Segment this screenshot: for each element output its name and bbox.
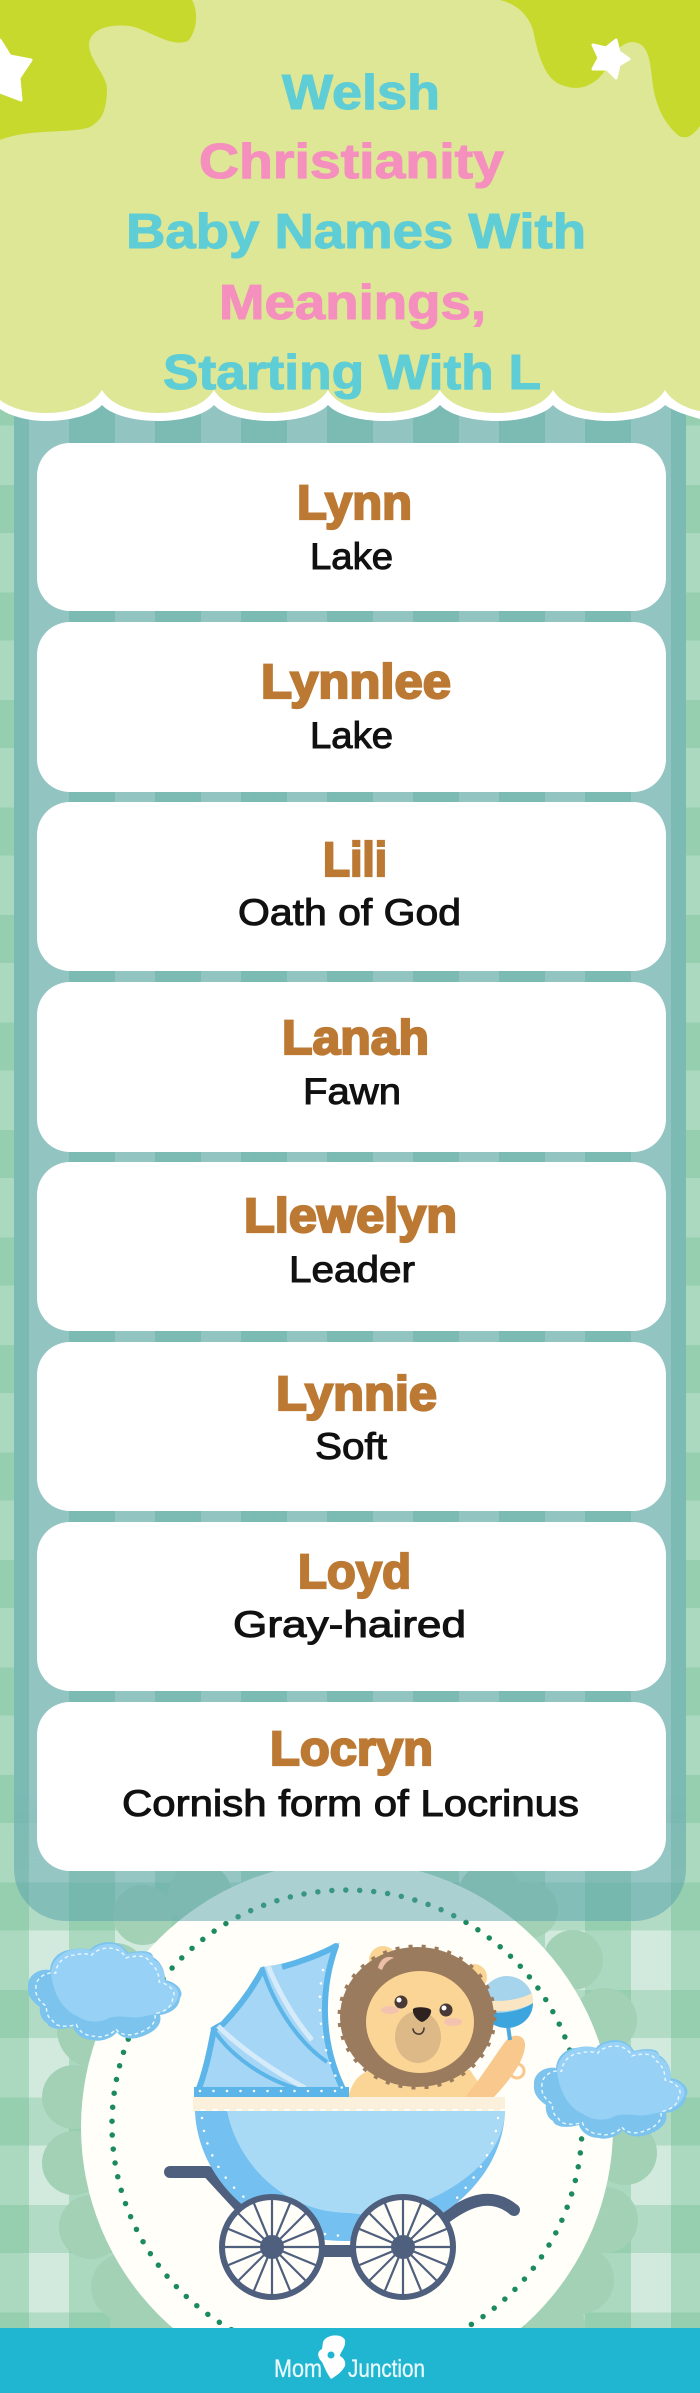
meaning: Cornish form of Locrinus: Cornish form of Locrinus xyxy=(122,1783,579,1824)
card: Lynnlee xyxy=(37,622,666,792)
lion ear right xyxy=(461,1964,487,1990)
wheel left xyxy=(222,2197,322,2297)
handle right xyxy=(445,2200,514,2218)
title xyxy=(126,66,586,400)
canopy xyxy=(194,1942,349,2097)
meaning: Fawn: Fawn xyxy=(303,1071,401,1112)
meaning: Lake: Lake xyxy=(310,715,393,756)
footer bar xyxy=(0,2328,700,2393)
title line: Welsh: Welsh xyxy=(282,66,440,120)
star right xyxy=(593,40,629,78)
meaning: Leader: Leader xyxy=(289,1249,415,1290)
lion cheeks xyxy=(381,2006,462,2026)
cloud left xyxy=(28,1942,182,2041)
card: Lynn xyxy=(37,443,666,611)
handle left xyxy=(170,2172,242,2209)
lion body xyxy=(348,2070,488,2097)
bowl xyxy=(195,2111,505,2241)
name: Loyd: Loyd xyxy=(298,1546,411,1599)
logo wordmark: Junction: Junction xyxy=(348,2355,425,2383)
rattle xyxy=(481,1976,533,2078)
meaning: Soft: Soft xyxy=(315,1426,388,1467)
lion ear inner xyxy=(378,1957,394,1970)
name: Llewelyn: Llewelyn xyxy=(244,1190,457,1243)
white circle backdrop xyxy=(81,1861,613,2393)
header banner xyxy=(0,0,700,421)
card: Llewelyn xyxy=(37,1162,666,1331)
dotted green ring xyxy=(112,1890,582,2360)
lion face xyxy=(366,1971,474,2073)
card: Lili xyxy=(37,802,666,971)
card: Loyd xyxy=(37,1522,666,1691)
lion muzzle xyxy=(395,2011,441,2063)
lime blob left xyxy=(0,0,196,140)
meaning: Gray-haired: Gray-haired xyxy=(233,1604,466,1645)
lime blob right xyxy=(500,0,700,137)
name: Lili: Lili xyxy=(323,834,387,887)
lion nose and smile xyxy=(413,2007,431,2034)
meaning: Lake: Lake xyxy=(310,536,393,577)
lion arm xyxy=(465,2036,525,2097)
lion ear left xyxy=(369,1946,397,1974)
name: Lynnlee: Lynnlee xyxy=(261,656,451,709)
scalloped green blob behind circle xyxy=(42,1863,657,2355)
cloud right xyxy=(534,2040,688,2139)
bowl rim xyxy=(193,2097,505,2110)
wheel right xyxy=(353,2197,453,2297)
axle xyxy=(320,2245,356,2257)
lion eyes xyxy=(394,1996,452,2016)
card: Lynnie xyxy=(37,1342,666,1511)
pale lime background xyxy=(0,0,700,413)
name: Locryn: Locryn xyxy=(270,1723,433,1776)
name: Lynn: Lynn xyxy=(297,477,412,530)
card: Locryn xyxy=(37,1702,666,1871)
title line: Christianity: Christianity xyxy=(199,135,504,189)
meaning: Oath of God: Oath of God xyxy=(238,892,461,933)
stroller with lion xyxy=(170,1942,533,2297)
name: Lynnie: Lynnie xyxy=(276,1368,437,1421)
title line: Baby Names With: Baby Names With xyxy=(126,205,586,259)
translucent teal panel xyxy=(14,370,686,1921)
white scallop edge xyxy=(0,380,700,421)
name: Lanah: Lanah xyxy=(282,1012,429,1065)
title line: Starting With L: Starting With L xyxy=(163,346,541,400)
title line: Meanings,: Meanings, xyxy=(219,276,486,330)
logo icon xyxy=(318,2335,345,2379)
lion mane xyxy=(340,1947,494,2087)
card: Lanah xyxy=(37,982,666,1152)
star left xyxy=(0,40,31,100)
logo wordmark: Mom: Mom xyxy=(274,2355,322,2383)
